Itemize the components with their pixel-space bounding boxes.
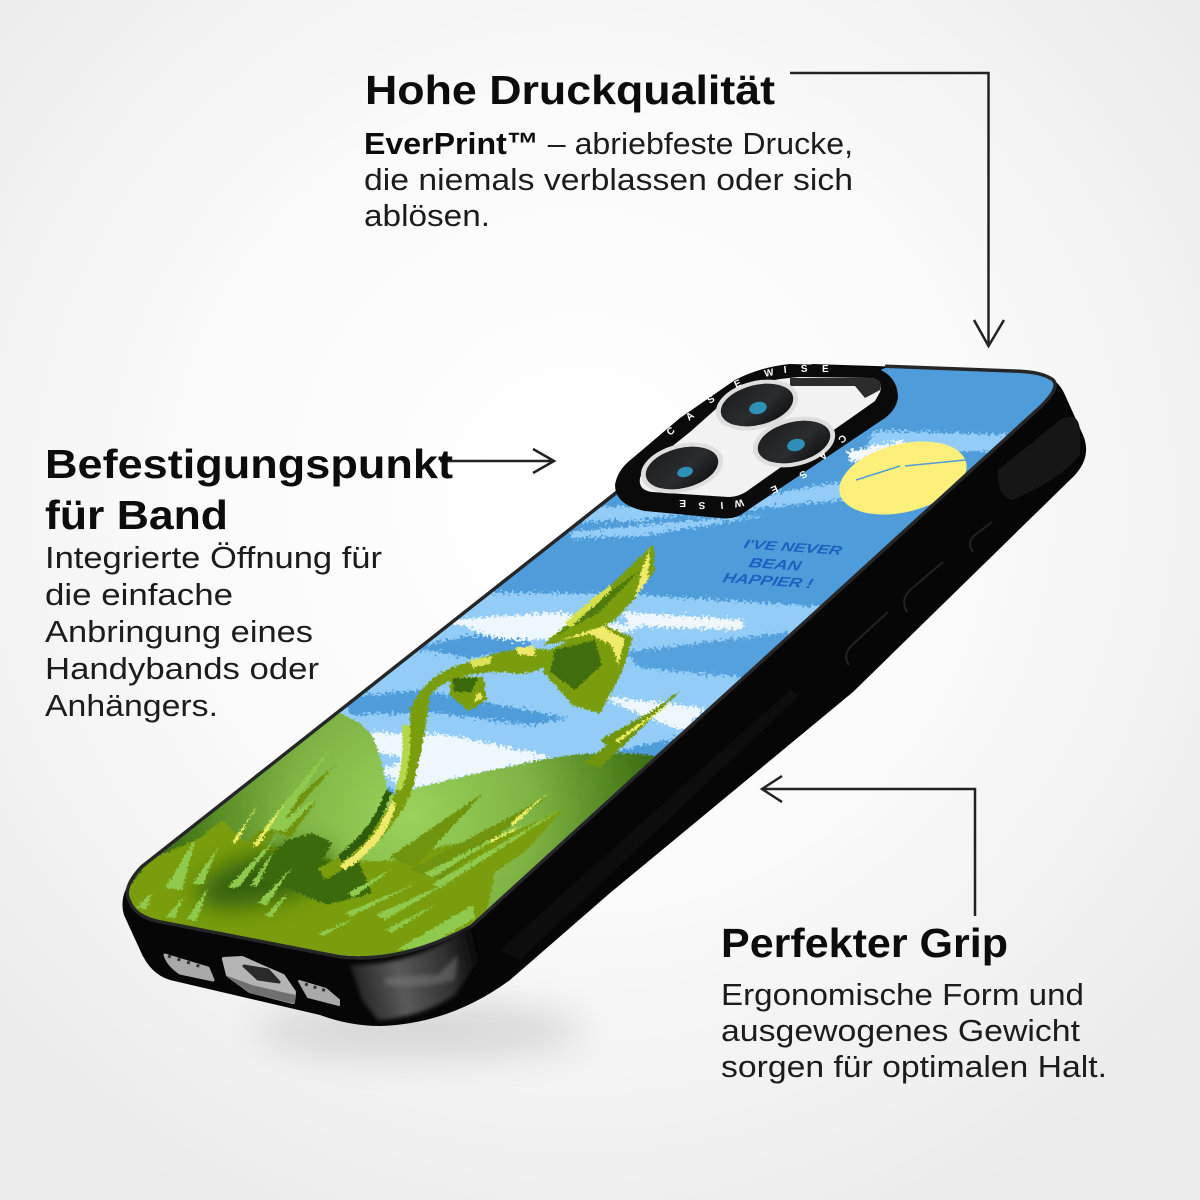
heading [45,441,453,538]
handwritten slogan: I'VE NEVER [742,536,845,558]
phone shadow [255,1004,585,1056]
phone case [122,364,1086,1026]
handwritten slogan: HAPPIER ! [721,570,816,591]
speaker right [299,981,339,1005]
side bulge [998,417,1080,500]
bottom corner highlight [350,925,478,1020]
case body [122,364,1086,1026]
description: ablösen. [364,198,490,233]
text block: grip [721,920,1107,1084]
right lens [747,409,841,475]
arrow: strap attachment [440,449,554,473]
heading: Perfekter Grip [721,920,1008,966]
description: ausgewogenes Gewicht [721,1013,1080,1048]
handwritten slogan: BEAN [747,555,805,574]
charging port [224,958,295,1004]
grass strokes [136,688,683,950]
description: Ergonomische Form und [721,977,1084,1012]
side lower texture [500,690,800,960]
upper cloud strokes [570,430,1030,538]
hills [129,713,655,956]
brand ring text [665,364,848,510]
heading: für Band [45,492,228,538]
description: Anhängers. [45,688,218,723]
description: Handybands oder [45,651,319,686]
brand ring text: CASEWISE [679,432,848,510]
handwritten slogan [722,540,842,588]
dark green shade [191,833,372,919]
description: EverPrint™ – abriebfeste Drucke, [364,126,853,161]
camera bump [615,364,898,518]
description: die einfache [45,577,233,612]
arrow: top print quality [790,73,1004,346]
sun [839,442,967,514]
top lens [710,372,804,438]
rim highlight [790,378,881,398]
screen rim [129,368,1053,956]
plant stem [318,646,552,880]
plant lower leaf [543,625,633,714]
description [364,126,853,233]
side buttons [846,522,992,665]
camera plate [640,377,881,497]
description [45,540,382,723]
description: die niemals verblassen oder sich [364,162,853,197]
speaker left [165,955,213,980]
printed artwork [129,368,1054,956]
text block: strap attachment [45,441,453,723]
description [721,977,1107,1084]
description: sorgen für optimalen Halt. [721,1049,1107,1084]
middle light sky [330,592,840,800]
left lens [635,435,729,501]
description: Integrierte Öffnung für [45,540,382,575]
text block: print quality [364,67,853,233]
arrow: grip [762,776,975,916]
olive foreground [125,808,565,960]
brand ring text: CASEWISE [665,364,829,438]
heading: Befestigungspunkt [45,441,453,487]
camera module [615,364,898,518]
description: Anbringung eines [45,614,313,649]
plant small leaf [450,677,487,711]
sky [129,368,1054,956]
heading: Hohe Druckqualität [365,67,775,113]
plant upper leaf [543,545,655,645]
